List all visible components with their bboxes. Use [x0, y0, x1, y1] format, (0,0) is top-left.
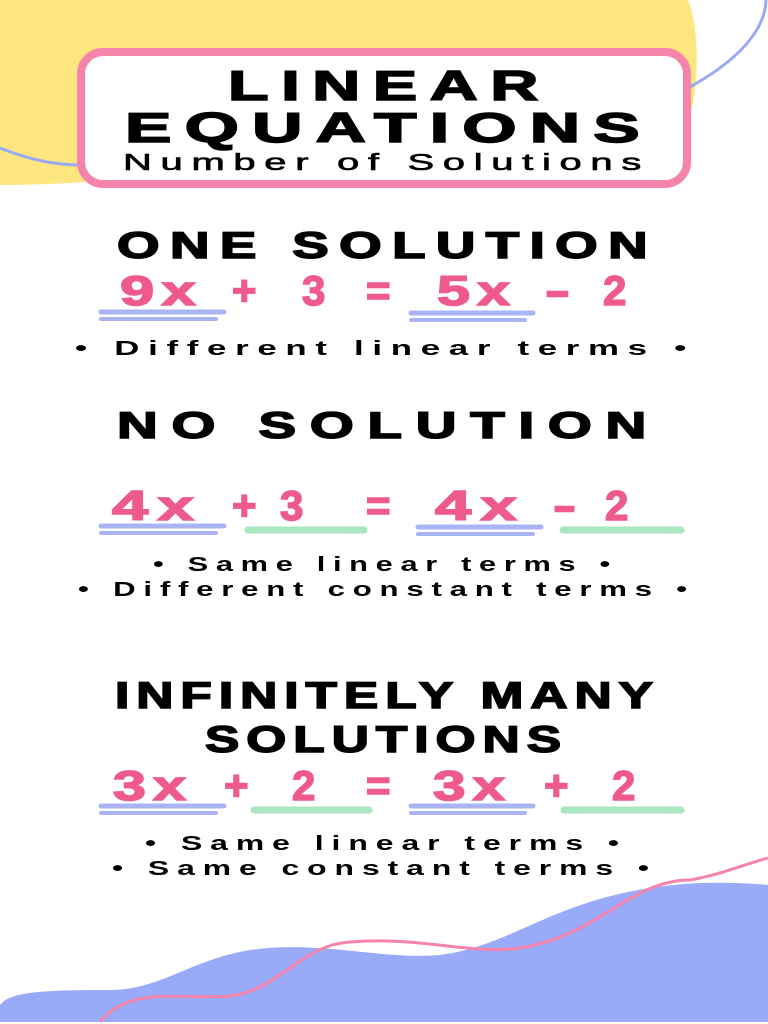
section: infinitely many solutions: = — [366, 762, 391, 809]
section: no solution: 4x — [435, 482, 526, 529]
section: one solution — [75, 225, 695, 360]
section: infinitely many solutions: INFINITELY MANY — [115, 675, 660, 716]
title box: EQUATIONS — [125, 104, 653, 151]
section: no solution — [78, 405, 695, 601]
section: infinitely many solutions: 3x — [113, 762, 193, 809]
background yellow blob — [0, 0, 697, 185]
equation: 3 — [302, 267, 325, 314]
equation: 9x — [120, 267, 203, 314]
section: infinitely many solutions: 3x — [433, 762, 512, 809]
section: one solution: ONE SOLUTION — [117, 225, 658, 266]
section: infinitely many solutions — [101, 675, 681, 880]
equation: 5x — [437, 267, 517, 314]
bullet: • Different linear terms • — [75, 338, 695, 360]
equation: = — [366, 267, 391, 314]
section: infinitely many solutions: + — [224, 762, 249, 809]
blue arc decoration — [0, 0, 766, 165]
section: no solution: • Different constant terms • — [78, 579, 695, 601]
bottom blue wave — [0, 883, 768, 1022]
section: infinitely many solutions: SOLUTIONS — [205, 719, 568, 760]
section: no solution: • Same linear terms • — [153, 554, 618, 576]
section: no solution: + — [232, 482, 257, 529]
section: infinitely many solutions: + — [544, 762, 569, 809]
section: no solution: NO SOLUTION — [117, 405, 660, 446]
equation: 2 — [603, 267, 626, 314]
pink line — [100, 858, 768, 1022]
section: no solution: - — [553, 482, 576, 529]
section: no solution: 3 — [280, 482, 303, 529]
equation: + — [232, 267, 257, 314]
underlines — [101, 312, 533, 320]
section: infinitely many solutions: • Same constant terms • — [112, 858, 657, 880]
section: infinitely many solutions: • Same linear terms • — [145, 833, 627, 855]
title box — [81, 52, 687, 184]
section: no solution: 4x — [112, 482, 203, 529]
title: LINEAR — [228, 62, 551, 109]
section: infinitely many solutions: 2 — [292, 762, 315, 809]
equation: - — [545, 267, 570, 314]
section: no solution: = — [366, 482, 391, 529]
subtitle: Number of Solutions — [123, 149, 650, 175]
section: infinitely many solutions: 2 — [612, 762, 635, 809]
section: no solution: 2 — [605, 482, 628, 529]
equation — [120, 267, 626, 314]
